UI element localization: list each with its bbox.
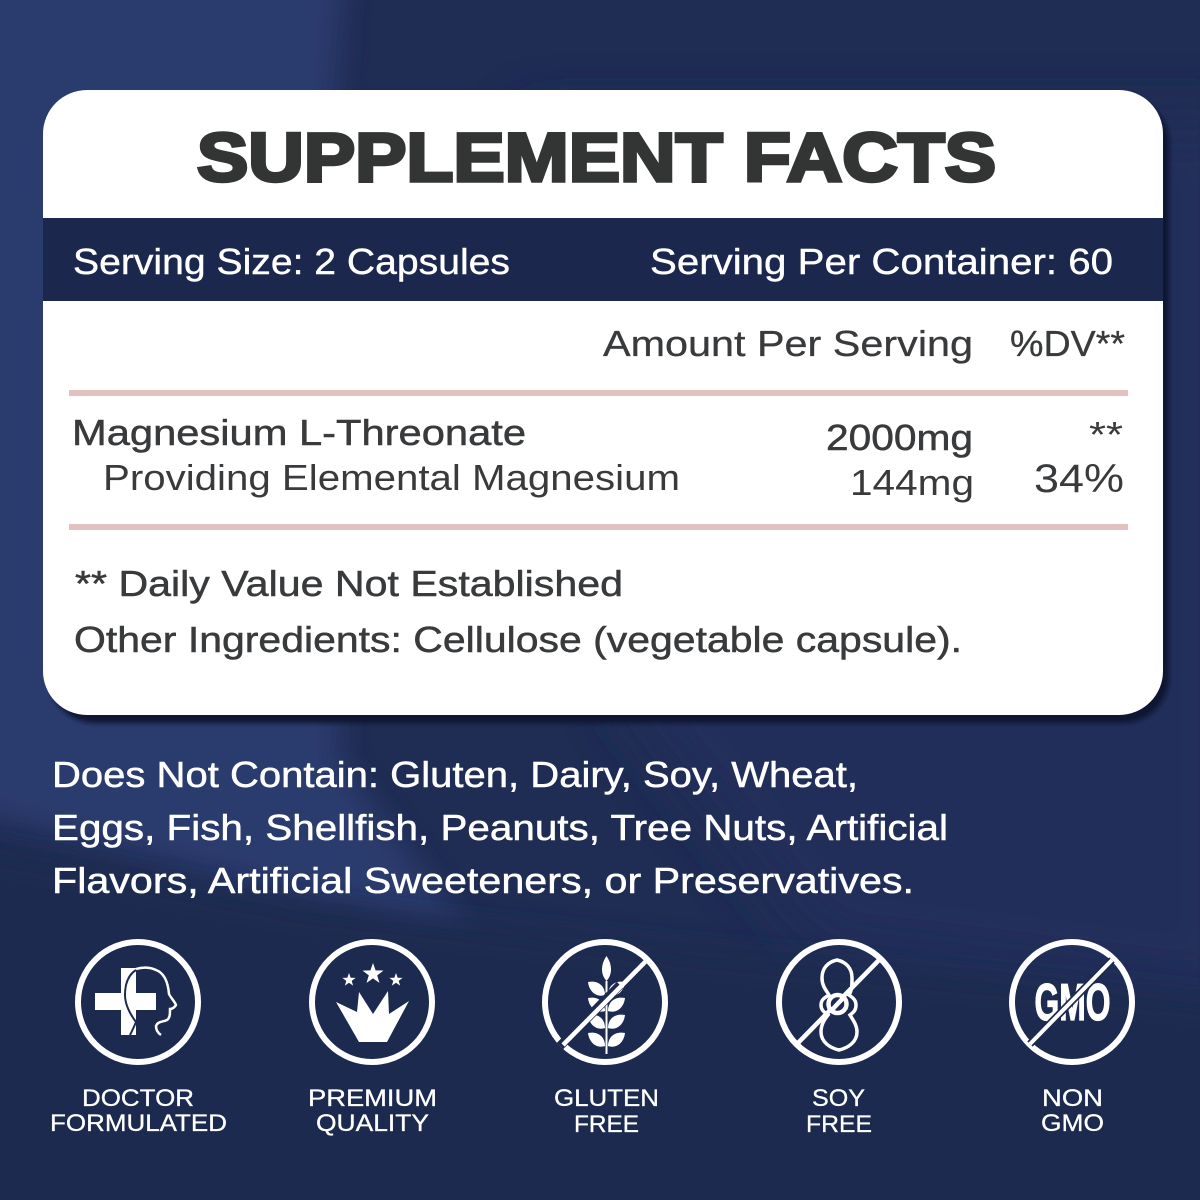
allergen statement: Eggs, Fish, Shellfish, Peanuts, Tree Nuts, Artificial xyxy=(52,807,948,848)
icon: soy free xyxy=(779,942,899,1062)
ingredient rows: Magnesium L-Threonate xyxy=(72,412,526,453)
label: soy free: SOY xyxy=(812,1085,865,1112)
label: non gmo xyxy=(1041,1085,1104,1137)
label: premium quality: PREMIUM xyxy=(308,1085,437,1112)
icon: doctor formulated xyxy=(78,942,198,1062)
column headers xyxy=(603,323,1125,364)
icon: gluten free xyxy=(545,942,665,1062)
allergen statement: Does Not Contain: Gluten, Dairy, Soy, Wheat, xyxy=(52,754,858,795)
ingredient rows: 2000mg xyxy=(826,417,973,458)
label: premium quality: QUALITY xyxy=(316,1110,429,1137)
label: gluten free xyxy=(554,1085,659,1138)
ingredient rows: Providing Elemental Magnesium xyxy=(103,457,680,498)
label: non gmo: NON xyxy=(1042,1085,1103,1112)
ingredient rows xyxy=(72,412,1124,503)
ingredient rows: 144mg xyxy=(850,462,974,503)
icon: premium quality xyxy=(312,942,432,1062)
label: doctor formulated: DOCTOR xyxy=(82,1085,194,1112)
serving band xyxy=(43,218,1163,301)
footnotes: Other Ingredients: Cellulose (vegetable capsule). xyxy=(74,619,962,660)
label: gluten free: FREE xyxy=(574,1111,639,1138)
ingredient rows: 34% xyxy=(1034,457,1124,501)
column headers: %DV** xyxy=(1010,323,1125,364)
allergen statement: Flavors, Artificial Sweeteners, or Preservatives. xyxy=(52,860,914,901)
serving band: Serving Per Container: 60 xyxy=(650,241,1113,282)
icon: non gmo: GMO xyxy=(1034,974,1110,1032)
label: gluten free: GLUTEN xyxy=(554,1085,659,1112)
serving band: Serving Size: 2 Capsules xyxy=(73,241,510,282)
footnotes xyxy=(74,563,962,660)
panel: supplement facts xyxy=(43,90,1169,723)
allergen statement xyxy=(52,754,948,901)
label: non gmo: GMO xyxy=(1041,1110,1104,1137)
label: soy free: FREE xyxy=(806,1111,872,1138)
heading: SUPPLEMENT FACTS xyxy=(197,119,996,196)
label: soy free xyxy=(806,1085,872,1138)
ingredient rows: ** xyxy=(1089,414,1123,455)
footnotes: ** Daily Value Not Established xyxy=(75,563,623,604)
icon: non gmo xyxy=(1012,942,1132,1062)
column headers: Amount Per Serving xyxy=(603,323,973,364)
label: doctor formulated: FORMULATED xyxy=(50,1110,227,1137)
label: premium quality xyxy=(308,1085,437,1137)
label: doctor formulated xyxy=(50,1085,227,1137)
